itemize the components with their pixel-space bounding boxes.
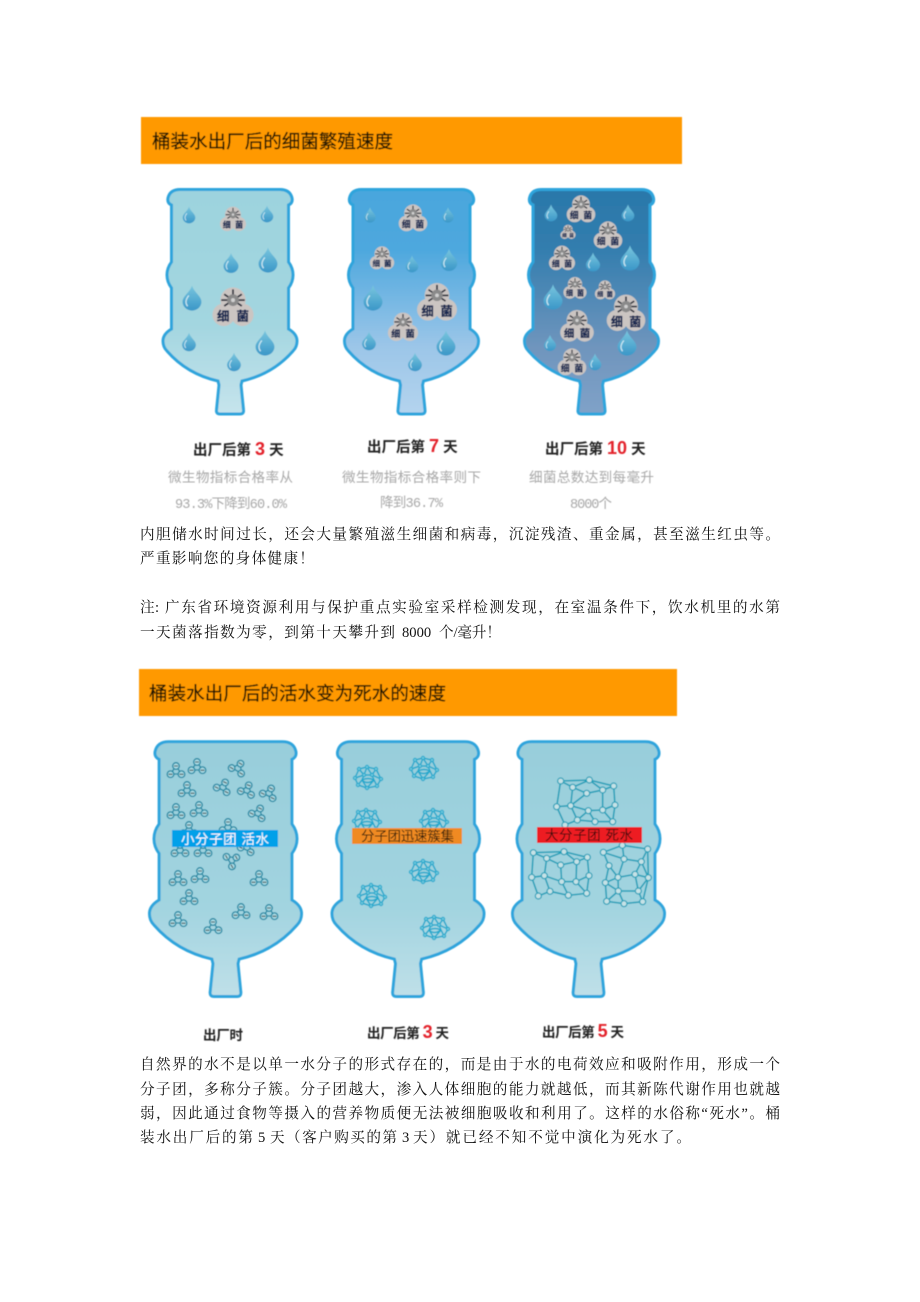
icon: bacterium bbox=[370, 246, 394, 269]
bottle: day 3 bbox=[163, 190, 297, 414]
icon: bacterium: 细 bbox=[570, 210, 579, 221]
caption: day 3 bbox=[168, 439, 293, 513]
icon: bacterium: 细 bbox=[421, 303, 434, 318]
text block: dead water explanation: 分子团，多称分子簇。分子团越大，渗入人体细胞的能力就越低，而其新陈代谢作用也就越 bbox=[140, 1081, 780, 1098]
text block: lab note bbox=[140, 598, 780, 641]
icon: bacterium: 菌 bbox=[610, 236, 619, 247]
text block: dead water explanation bbox=[140, 1055, 780, 1146]
icon: bacterium: 菌 bbox=[384, 258, 392, 268]
icon: bacterium: 菌 bbox=[415, 219, 424, 230]
caption: day 5: 出厂后第 5 天 bbox=[542, 1021, 624, 1041]
bottle: day 5 large clusters bbox=[512, 742, 665, 997]
heading: bacteria growth speed: 桶装水出厂后的细菌繁殖速度 bbox=[152, 131, 393, 152]
text block: lab note: 注 bbox=[140, 600, 155, 616]
icon: bacterium bbox=[567, 195, 595, 222]
icon: bacterium: 菌 bbox=[574, 363, 583, 374]
icon: bacterium small bbox=[220, 207, 246, 231]
caption: day 10: 出厂后第 10 天 bbox=[545, 438, 646, 458]
icon: bacterium: 菌 bbox=[629, 314, 641, 329]
text block: dead water explanation: 自然界的水不是以单一水分子的形式存在的，而是由于水的电荷效应和吸附作用，形成一个 bbox=[140, 1055, 780, 1073]
caption: day 10 bbox=[529, 438, 654, 513]
icon: bacterium bbox=[417, 283, 457, 321]
icon: bacterium: 菌 bbox=[607, 291, 613, 299]
icon: bacterium bbox=[399, 204, 427, 231]
icon: bacterium small: 菌 bbox=[235, 220, 243, 230]
text block: lab note: 广东省环境资源利用与保护重点实验室采样检测发现，在室温条件下，饮水机里的水第 bbox=[165, 598, 780, 616]
text block: lab note: 个/毫升！ bbox=[439, 624, 501, 641]
heading: live water to dead water speed: 桶装水出厂后的活水变为死水的速度 bbox=[149, 683, 446, 704]
panel: bacteria growth infographic bbox=[141, 117, 682, 513]
caption: at factory: 出厂时 bbox=[203, 1027, 244, 1043]
icon: bacterium: 菌 bbox=[440, 303, 453, 318]
icon: bacterium: 细 bbox=[566, 289, 573, 298]
icon: bacterium tiny bbox=[560, 225, 576, 239]
icon: bacterium bbox=[607, 295, 645, 331]
icon: bacterium small: 细 bbox=[223, 220, 231, 230]
text block: dead water explanation: 3 bbox=[402, 1130, 409, 1146]
heading: live water to dead water speed bbox=[139, 669, 677, 716]
caption: day 10: 8000个 bbox=[570, 496, 612, 513]
caption: day 7 bbox=[342, 436, 481, 512]
text block: dead water explanation: 弱，因此通过食物等摄入的营养物质便无法被细胞吸收和利用了。这样的水俗称“死水”。桶 bbox=[140, 1104, 780, 1122]
text block: dead water explanation: 天（客户购买的第 bbox=[270, 1129, 397, 1146]
caption: day 3: 微生物指标合格率从 bbox=[168, 469, 293, 487]
icon: bacterium bbox=[595, 280, 615, 299]
icon: bacterium: 细 bbox=[402, 219, 411, 230]
bottle: day 7 bbox=[344, 190, 478, 414]
icon: bacterium: 菌 bbox=[577, 289, 584, 298]
icon: bacterium bbox=[563, 277, 587, 299]
text block: dead water explanation: 5 bbox=[258, 1130, 265, 1146]
label band: clusters gather rapidly: 分子团迅速簇集 bbox=[361, 829, 454, 844]
icon: bacterium: 细 bbox=[597, 291, 603, 299]
icon: bacterium: 细 bbox=[597, 236, 606, 247]
icon: bacterium bbox=[388, 313, 418, 341]
caption: day 3: 出厂后第 3 天 bbox=[367, 1022, 450, 1042]
icon: bacterium: 细 bbox=[391, 328, 400, 339]
icon: bacterium: 细 bbox=[611, 314, 623, 329]
label band: large clusters, dead water: 大分子团 死水 bbox=[545, 828, 634, 843]
icon: bacterium: 细 bbox=[561, 363, 570, 374]
text block: dead water explanation: 天）就已经不知不觉中演化为死水了。 bbox=[413, 1129, 691, 1146]
panel: live water to dead water infographic bbox=[139, 669, 677, 1043]
icon: bacterium: 菌 bbox=[583, 210, 592, 221]
caption: day 7: 降到36.7% bbox=[380, 495, 444, 512]
text block: health warning bbox=[140, 525, 780, 567]
icon: bacterium: 细 bbox=[372, 258, 380, 268]
text block: lab note: 8000 bbox=[402, 625, 431, 641]
chart: molecular networks bbox=[529, 777, 651, 907]
heading: bacteria growth speed bbox=[141, 117, 682, 164]
icon: bacterium tiny: 细 bbox=[562, 232, 567, 239]
text block: dead water explanation: 装水出厂后的第 bbox=[140, 1129, 253, 1146]
icon: bacterium large: 细 bbox=[217, 309, 230, 324]
icon: bacterium bbox=[560, 310, 594, 342]
icon: bacterium bbox=[549, 246, 575, 270]
icon: bacterium bbox=[594, 221, 622, 248]
text block: health warning: 内胆储水时间过长，还会大量繁殖滋生细菌和病毒，沉淀残渣、重金属，甚至滋生红虫等。 bbox=[140, 525, 780, 543]
bottle: day 3 clusters bbox=[332, 742, 484, 997]
caption: day 7: 微生物指标合格率则下 bbox=[342, 469, 481, 487]
icon: bacterium large: 菌 bbox=[236, 309, 249, 324]
icon: bacterium large bbox=[212, 287, 254, 326]
text block: lab note: : bbox=[155, 600, 159, 616]
icon: bacterium: 菌 bbox=[406, 328, 415, 339]
label band: small clusters, live water: 小分子团 活水 bbox=[181, 832, 270, 847]
icon: bacterium: 菌 bbox=[564, 259, 572, 269]
bottle: day 10 bbox=[524, 190, 658, 414]
icon: bacterium: 细 bbox=[552, 259, 560, 269]
caption: day 3: 出厂后第 3 天 bbox=[193, 439, 284, 459]
icon: bacterium: 细 bbox=[564, 327, 574, 340]
text block: lab note: 一天菌落指数为零，到第十天攀升到 bbox=[140, 623, 395, 641]
icon: bacterium bbox=[558, 348, 586, 375]
text block: health warning: 严重影响您的身体健康！ bbox=[140, 549, 314, 567]
caption: day 3: 93.3%下降到60.0% bbox=[175, 496, 288, 513]
icon: bacterium: 菌 bbox=[580, 327, 590, 340]
caption: day 10: 细菌总数达到每毫升 bbox=[529, 469, 654, 487]
caption: day 7: 出厂后第 7 天 bbox=[367, 436, 458, 456]
bottle: at factory bbox=[149, 742, 302, 997]
icon: bacterium tiny: 菌 bbox=[569, 232, 574, 239]
